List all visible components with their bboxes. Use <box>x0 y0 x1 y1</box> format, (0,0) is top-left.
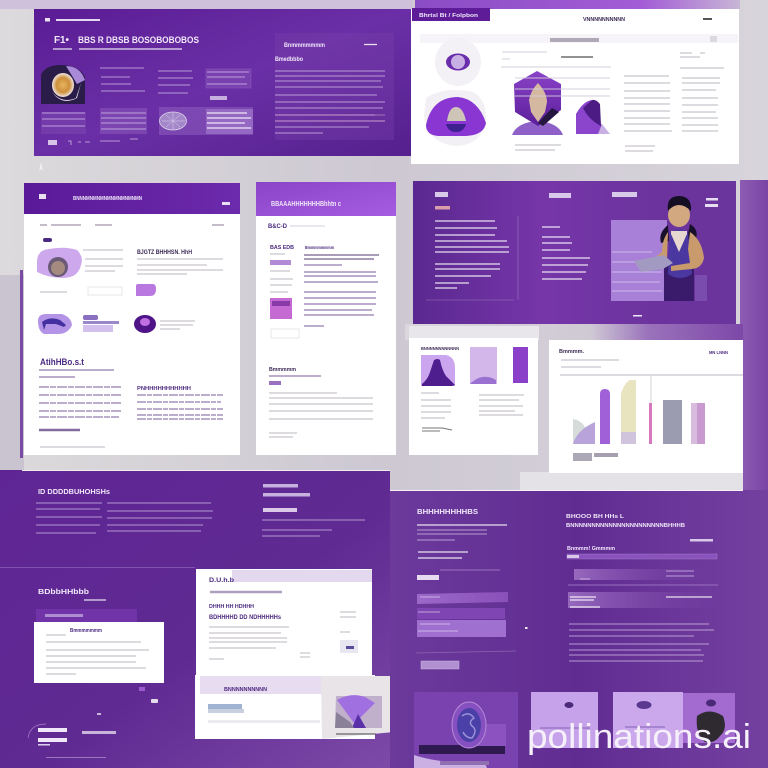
heading: right column <box>566 514 713 552</box>
watermark: pollinations.ai <box>527 718 751 756</box>
white document card: DHHH HH HDHHH <box>209 604 254 610</box>
white document card: BDHHHHD DD NDHHHHHs <box>209 615 282 621</box>
image card: lilac oval icon <box>613 692 683 748</box>
search bar <box>420 34 738 43</box>
icon: lilac lens <box>37 238 82 278</box>
report heading: VNNNNNNNNNN <box>583 17 625 23</box>
card heading: BNNNNNNNNNNNN <box>421 346 459 351</box>
lilac card <box>611 192 707 301</box>
chart corner label: MN LNNN <box>709 350 728 355</box>
sidebar article: Bmedbbbo <box>275 57 303 63</box>
panel: top left purple dashboard <box>34 9 411 156</box>
small label box <box>421 661 459 669</box>
chart strip left <box>41 108 147 134</box>
heading: dashboard title: F1• <box>54 34 69 46</box>
panel: purple presenter slide <box>413 181 736 324</box>
icon: lilac capsule <box>38 314 72 334</box>
chart heading: Bmmmm. <box>559 349 584 355</box>
brain diagram panel <box>159 107 253 135</box>
heading: dashboard title: BBS R DBSB BOSOBOBOBOS <box>78 35 199 46</box>
image: woman portrait <box>421 355 455 386</box>
panel: bottom left purple area <box>0 470 394 768</box>
footer icons of dashboard <box>48 139 138 145</box>
panel: white bar chart page <box>520 340 743 490</box>
icon: layered bars <box>83 315 119 332</box>
heading: right column: BNNNNNNNNNNNNNNNNNNNNNNBHHHB <box>566 523 685 529</box>
heading: right column: Bnmmm! Gmmmm <box>567 546 615 552</box>
article text block <box>569 624 714 661</box>
icon: central shield gem <box>512 71 563 135</box>
heading: right column: BHOOO BH HHs L <box>566 514 625 520</box>
heading: left column <box>417 509 507 580</box>
image: violet oval medallion <box>414 692 518 768</box>
bar chart <box>573 380 705 444</box>
lower left article <box>39 370 121 447</box>
text columns in dashboard <box>100 68 251 100</box>
column one text <box>426 192 518 300</box>
lower right article <box>137 386 223 419</box>
panel: top right white report <box>411 0 740 164</box>
lower heading: AtihHBo.s.t <box>40 357 84 367</box>
text block right <box>262 484 365 536</box>
page header band <box>256 182 396 216</box>
panel: white page with icons <box>24 183 240 455</box>
image: lilac doorway <box>470 347 497 384</box>
image card: lilac speech icon <box>531 692 598 748</box>
subheading with tab <box>36 589 137 623</box>
icon: right wedge gem <box>576 100 610 134</box>
article text <box>304 245 379 326</box>
text beside lens <box>40 250 123 295</box>
icon: pink box <box>270 298 292 319</box>
heading: dashboard title <box>45 18 199 49</box>
sidebar list with chart <box>270 245 299 338</box>
white note card: Bmmmmmmm <box>70 628 103 634</box>
icon: large purple bowl <box>424 90 486 146</box>
sidebar article: Bnmmmmmmm <box>284 43 325 49</box>
white lower card <box>195 675 375 739</box>
image card: dark stone <box>683 693 735 743</box>
lower article: Bmmmmm <box>269 367 297 373</box>
heading: top text block <box>36 489 213 533</box>
lower right article: PNHHHHHHHHHHH <box>137 386 191 392</box>
small marker <box>525 627 528 629</box>
subheading and paragraph <box>137 249 223 274</box>
white document card: D.U.h.b <box>209 578 234 584</box>
sidebar list with chart: BAS EDB <box>270 245 294 251</box>
logo badge with caption <box>28 724 116 758</box>
page header band: BNNNMNMNMNMNMNMNMNMN <box>73 196 142 202</box>
page title: BBAAAHHHHHHHBhhtn c <box>271 201 341 208</box>
panel: small white image card <box>409 326 539 455</box>
report text columns <box>501 52 724 151</box>
sub title <box>268 224 325 230</box>
white document card <box>196 569 372 675</box>
progress bars <box>567 554 718 608</box>
sub title: B&C-D <box>268 224 288 230</box>
illustration: presenter figure <box>634 196 718 301</box>
image card: faceted gem <box>321 676 394 739</box>
page header band <box>24 183 240 214</box>
white note card <box>34 622 164 683</box>
card text <box>421 393 524 431</box>
icon: small circle gem <box>435 38 481 86</box>
image: purple banner <box>513 347 528 383</box>
sidebar article <box>275 33 394 140</box>
lower article <box>269 367 373 437</box>
chart legend <box>573 453 618 461</box>
article text: Bmmmmmmmm <box>305 245 334 250</box>
white lower card: BNNNNNNNNNN <box>224 687 267 693</box>
panel: bottom right purple area <box>390 490 768 768</box>
panel: narrow white page <box>256 182 396 455</box>
small decorative badges <box>97 687 158 715</box>
image: portrait with golden flower <box>41 65 85 104</box>
heading: left column: BHHHHHHHHBS <box>417 509 478 516</box>
icon: small cursor arrow <box>39 162 43 171</box>
subheading with tab: BDbbHHbbb <box>38 589 89 596</box>
tab label: Bhrtsl Bt / Folpbon <box>419 13 479 19</box>
column two text <box>542 193 590 279</box>
lilac bands <box>417 592 508 637</box>
subheading and paragraph: BJGTZ BHHHSN. HhH <box>137 249 192 256</box>
icon: dark purple disc <box>134 315 156 333</box>
text beside disc <box>160 321 195 329</box>
heading: top text block: ID DDDDBUHOHSHs <box>38 489 110 496</box>
icon: lilac pill <box>136 284 156 296</box>
